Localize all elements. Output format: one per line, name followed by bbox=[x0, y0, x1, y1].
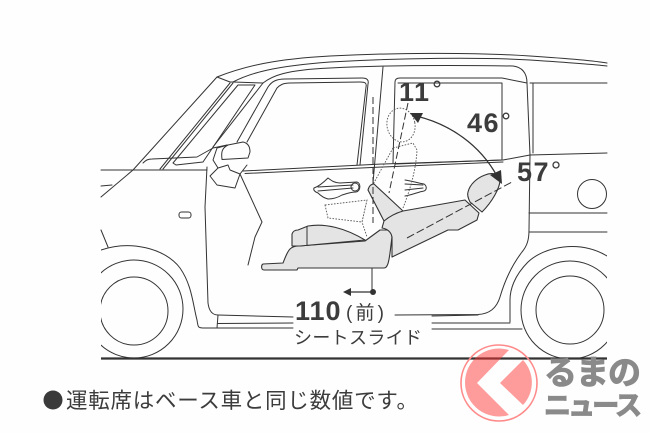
belt lines bbox=[243, 153, 607, 171]
door handle bbox=[314, 178, 426, 199]
upright seat position dotted bbox=[308, 106, 418, 243]
rear side window bbox=[393, 78, 527, 163]
windshield and front quarter glass bbox=[101, 77, 217, 247]
footnote: 運転席はベース車と同じ数値です。 bbox=[66, 389, 418, 413]
seat slide value: (前) bbox=[346, 302, 384, 324]
seat slide caption: シートスライド bbox=[294, 328, 422, 348]
front door window bbox=[237, 78, 368, 165]
seat slide value: 110 bbox=[295, 296, 342, 326]
roof lines bbox=[217, 53, 607, 77]
side marker bbox=[179, 212, 191, 218]
angle reference lines bbox=[373, 97, 512, 238]
door mirror bbox=[210, 142, 250, 188]
label: 57 degrees: 57 bbox=[517, 157, 550, 187]
car side outline bbox=[85, 53, 619, 359]
seat slide value bbox=[295, 296, 384, 326]
door shut line bbox=[372, 67, 383, 290]
label: 46 degrees: 46 bbox=[467, 108, 500, 138]
headrest bbox=[468, 174, 500, 212]
arrow: recline arc bbox=[410, 113, 502, 184]
seat base bbox=[262, 230, 392, 270]
watermark logo: ニュース bbox=[544, 391, 642, 421]
reclined seat bbox=[262, 174, 500, 270]
lower seat back bbox=[368, 184, 403, 221]
seat cushion bbox=[292, 225, 365, 246]
watermark logo: るまの bbox=[544, 354, 641, 391]
label: 11 degrees: 11 bbox=[399, 77, 431, 107]
rear wheel bbox=[432, 247, 619, 359]
fuel lid bbox=[578, 180, 606, 208]
main seat back bbox=[382, 200, 479, 257]
arrow: seat slide bbox=[343, 288, 376, 296]
watermark logo bbox=[461, 345, 642, 421]
front wheel bbox=[85, 246, 293, 358]
ground line bbox=[101, 357, 607, 360]
